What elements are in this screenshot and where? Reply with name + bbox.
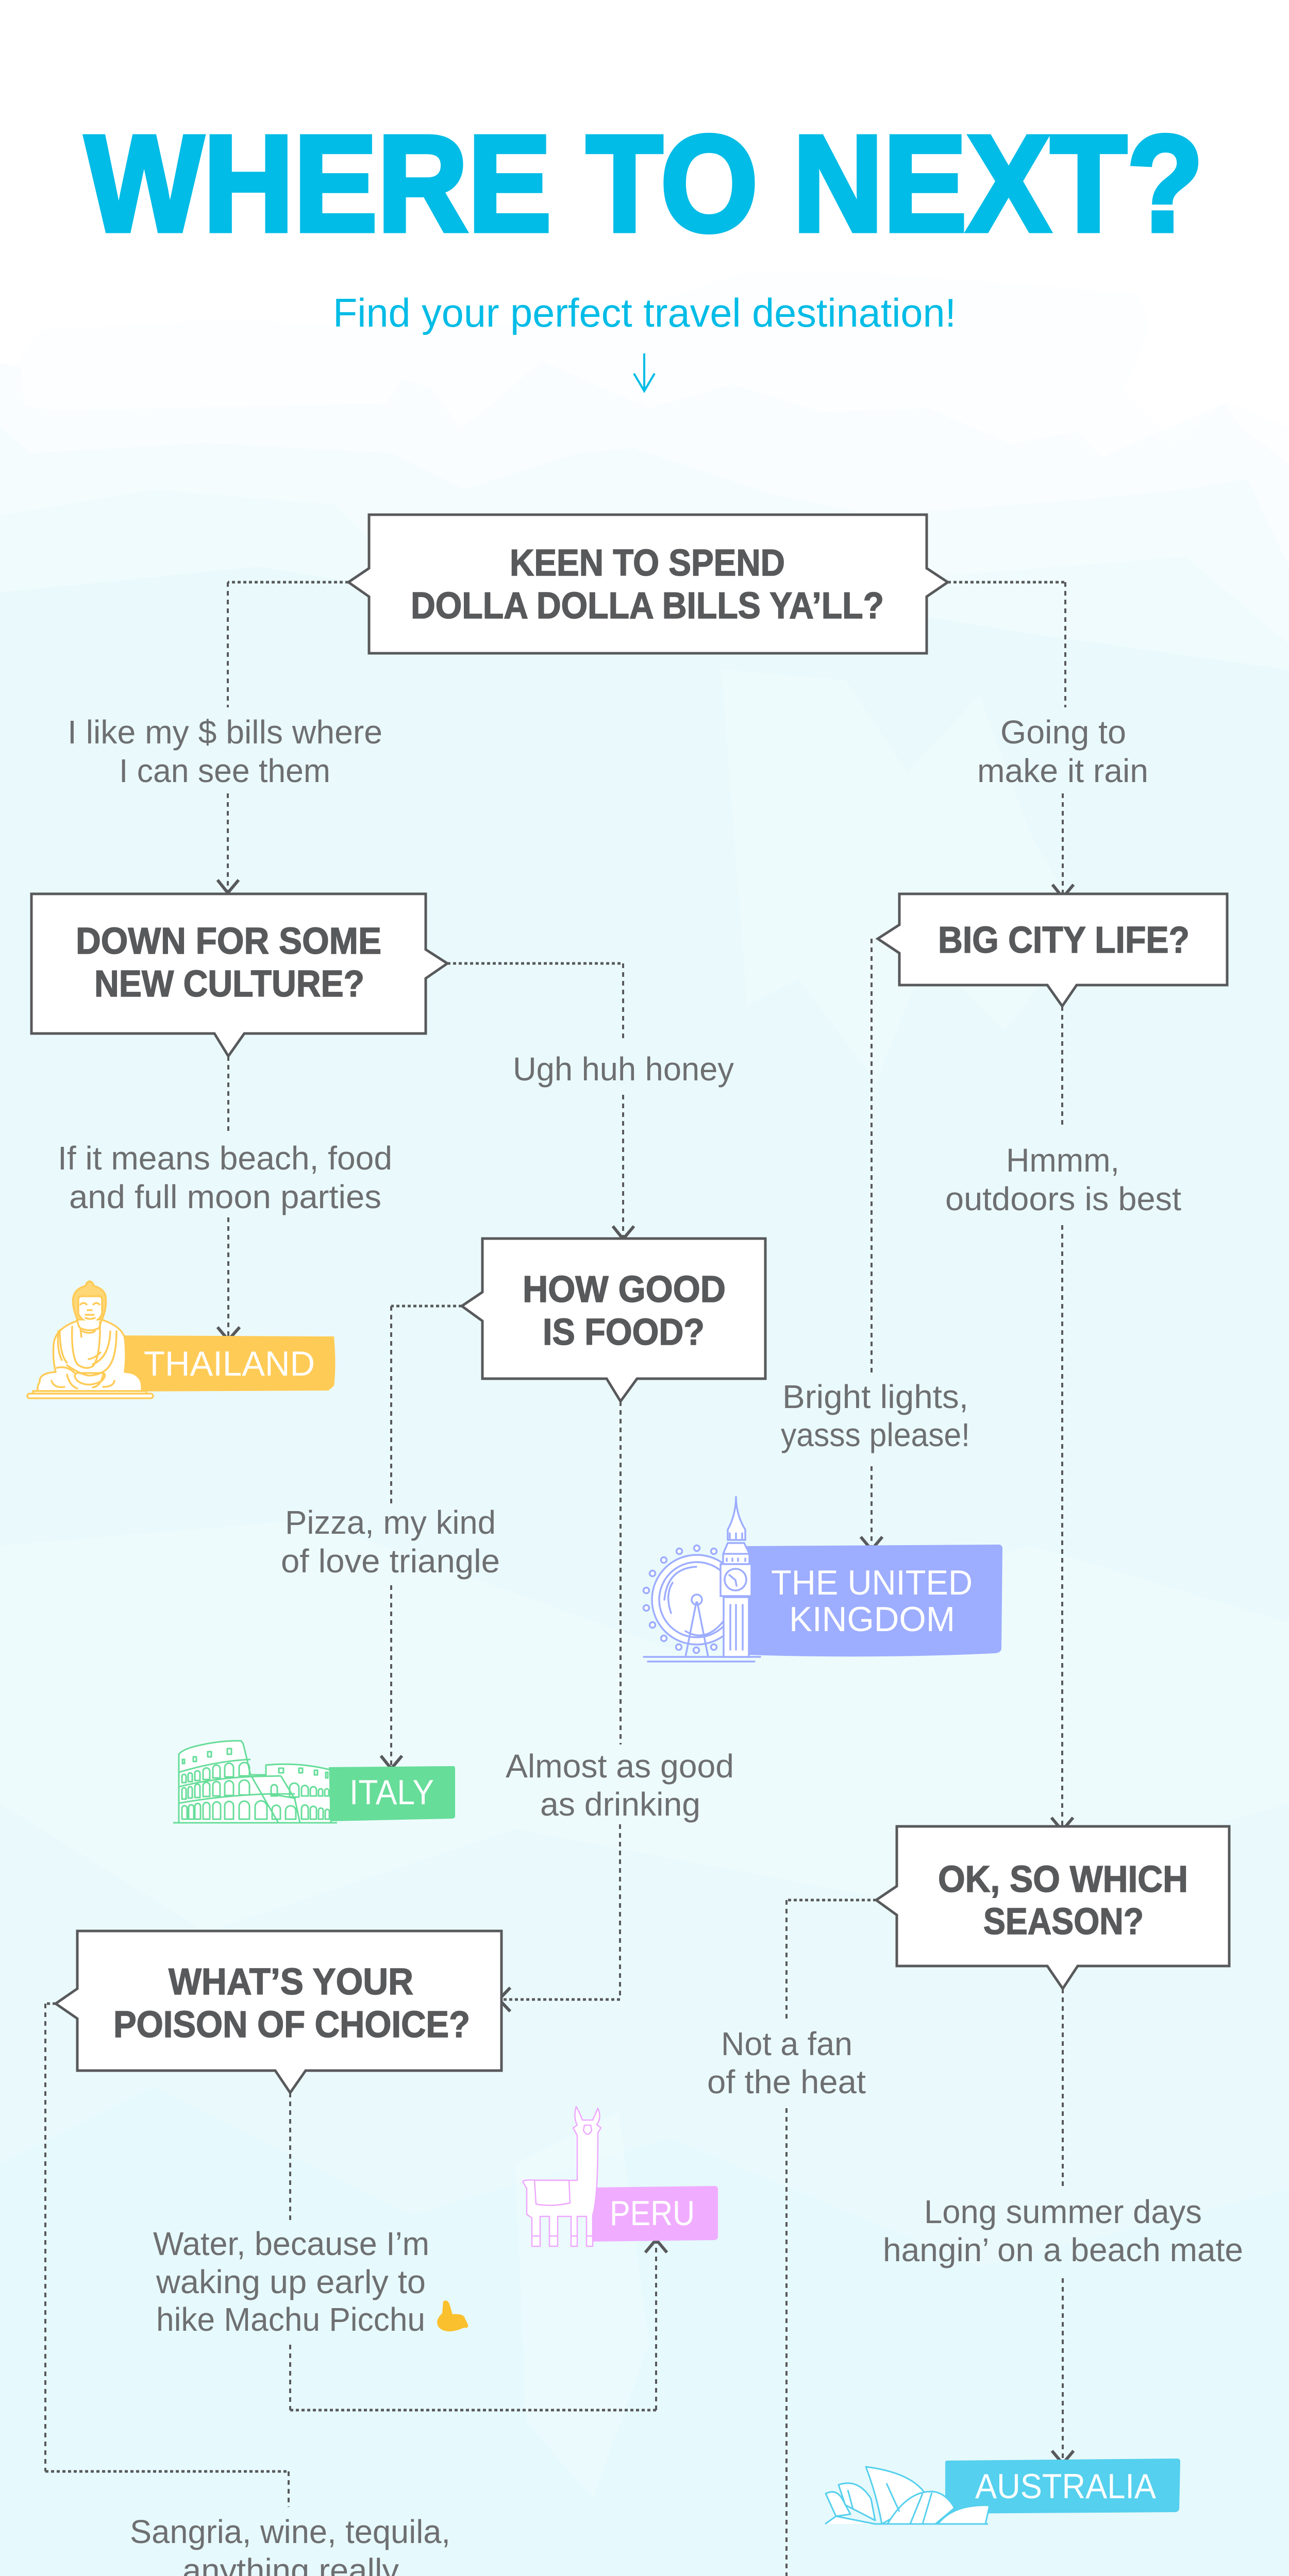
question: how good is food: HOW GOOD — [523, 1269, 726, 1310]
answer: outdoors: outdoors is best — [945, 1180, 1181, 1217]
question: dolla bills: DOLLA DOLLA BILLS YA’LL? — [411, 585, 884, 626]
subtitle: Find your perfect travel destination! — [333, 290, 956, 335]
answer: bills — [68, 714, 382, 789]
answer: bright lights: Bright lights, — [782, 1378, 968, 1415]
arrow: season to winter — [776, 1900, 876, 2576]
answer: outdoors: Hmmm, — [1006, 1142, 1119, 1179]
answer: make it rain — [977, 714, 1148, 789]
answer: heat — [707, 2025, 866, 2100]
answer: beach — [58, 1140, 392, 1215]
question: season: SEASON? — [983, 1901, 1144, 1942]
question: how good is food — [462, 1239, 765, 1401]
question: big city — [878, 894, 1227, 1006]
answer: water: waking up early to — [156, 2263, 426, 2300]
arrow: big city yes to uk — [861, 939, 882, 1550]
destination: thailand — [27, 1281, 335, 1398]
arrow: poison to spain — [45, 2004, 301, 2576]
icon: colosseum — [173, 1741, 337, 1823]
background: lighter patches — [0, 670, 1289, 2576]
answer: water: Water, because I’m — [153, 2225, 429, 2262]
arrow: big city no to season — [1051, 1006, 1073, 1831]
answer: ugh huh: Ugh huh honey — [513, 1050, 734, 1088]
answer: bills: I can see them — [119, 752, 330, 789]
arrow: culture no to thailand — [217, 1056, 240, 1340]
answer: bright lights: yasss please! — [781, 1416, 970, 1453]
question: season — [876, 1826, 1229, 1989]
arrow: to down for culture — [217, 582, 348, 893]
answer: drinking: as drinking — [540, 1786, 700, 1823]
destination: peru — [523, 2107, 718, 2246]
title: WHERE TO NEXT? — [85, 107, 1203, 260]
question: new culture — [31, 894, 447, 1056]
destination: peru: PERU — [610, 2194, 695, 2233]
question: dolla bills: KEEN TO SPEND — [510, 543, 785, 584]
icon: big ben and london eye — [643, 1496, 760, 1662]
answer: beach: and full moon parties — [69, 1178, 381, 1215]
question: poison — [56, 1931, 501, 2093]
icon: llama — [523, 2107, 601, 2246]
question: season: OK, SO WHICH — [938, 1859, 1188, 1900]
answer: summer: hangin’ on a beach mate — [883, 2231, 1243, 2268]
question: how good is food: IS FOOD? — [543, 1312, 705, 1353]
destination: italy — [173, 1741, 455, 1823]
answer: heat: of the heat — [707, 2063, 866, 2100]
answer: pizza — [281, 1504, 500, 1580]
answer: bright lights — [781, 1378, 970, 1453]
question: dolla bills — [348, 515, 948, 653]
question: new culture: NEW CULTURE? — [94, 963, 364, 1005]
answer: pizza: Pizza, my kind — [285, 1504, 496, 1541]
arrow: food to italy — [381, 1306, 462, 1769]
destination: united kingdom: THE UNITED — [771, 1563, 973, 1602]
arrow: poison to peru — [290, 2093, 667, 2410]
arrow: down from subtitle — [634, 353, 655, 391]
destination: united kingdom: KINGDOM — [789, 1600, 955, 1639]
arrow: to big city — [948, 582, 1074, 897]
destination: australia — [825, 2459, 1180, 2524]
answer: pizza: of love triangle — [281, 1543, 500, 1580]
question: big city: BIG CITY LIFE? — [938, 920, 1190, 961]
destination: italy: ITALY — [349, 1773, 434, 1812]
answer: outdoors — [945, 1142, 1181, 1217]
destination: united kingdom — [643, 1496, 1002, 1662]
icon: shaka hand — [437, 2300, 468, 2331]
answer: sangria: Sangria, wine, tequila, — [130, 2513, 450, 2550]
question: new culture: DOWN FOR SOME — [76, 921, 381, 962]
question: poison: POISON OF CHOICE? — [113, 2004, 470, 2045]
answer: drinking: Almost as good — [506, 1748, 734, 1785]
destination: thailand: THAILAND — [144, 1344, 315, 1383]
arrow: culture yes to how good — [447, 963, 634, 1239]
answer: water — [153, 2225, 468, 2338]
answer: water: hike Machu Picchu — [156, 2301, 425, 2338]
answer: beach: If it means beach, food — [58, 1140, 392, 1177]
arrow: food to poison — [499, 1401, 621, 2011]
answer: make it rain: Going to — [1000, 714, 1126, 751]
answer: bills: I like my $ bills where — [68, 714, 382, 751]
answer: heat: Not a fan — [721, 2025, 852, 2062]
arrow: season to australia — [1052, 1989, 1074, 2464]
answer: summer: Long summer days — [924, 2193, 1202, 2230]
icon: buddha — [27, 1281, 153, 1398]
answer: sangria — [130, 2513, 450, 2576]
answer: summer — [883, 2193, 1243, 2268]
answer: drinking — [506, 1748, 734, 1823]
destination: australia: AUSTRALIA — [975, 2467, 1157, 2506]
icon: sydney opera house — [825, 2467, 990, 2524]
answer: make it rain: make it rain — [977, 752, 1148, 789]
question: poison: WHAT’S YOUR — [169, 1961, 413, 2003]
